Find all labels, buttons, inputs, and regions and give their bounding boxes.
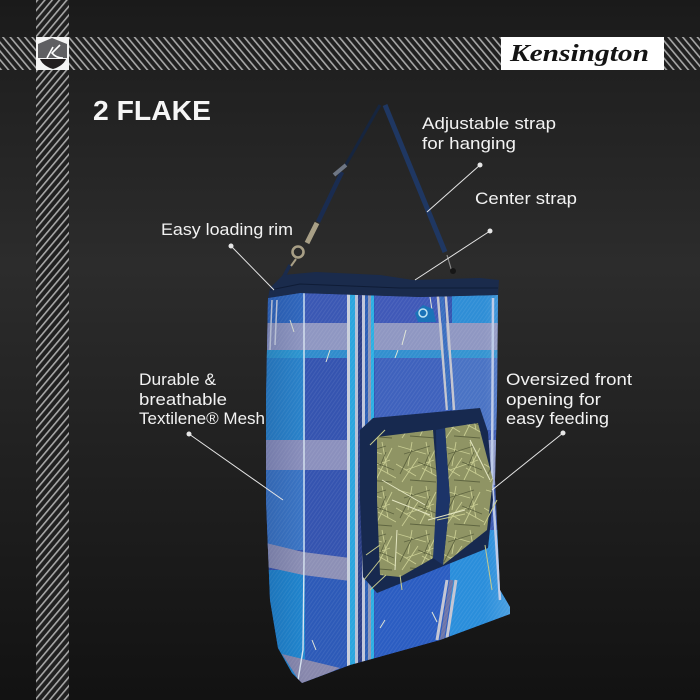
hay specks on fabric bbox=[290, 297, 437, 650]
icon: K shield logo bbox=[36, 37, 69, 70]
callout: front opening: opening for bbox=[506, 390, 601, 409]
callout: adjustable strap bbox=[422, 114, 556, 212]
callout: textilene mesh: breathable bbox=[139, 390, 227, 409]
callout: textilene mesh: Textilene® Mesh bbox=[139, 409, 265, 428]
callout: textilene mesh: Durable & bbox=[139, 370, 217, 389]
hanging strap bbox=[283, 105, 456, 278]
icon: metal snap clip bbox=[291, 223, 317, 266]
brand logo: Kensington bbox=[501, 37, 664, 70]
horizontal hatched band bbox=[0, 37, 700, 70]
hay left flake bbox=[377, 430, 437, 577]
center strap bbox=[433, 428, 450, 565]
bag logo patch bbox=[415, 305, 436, 322]
callout: front opening: Oversized front bbox=[506, 370, 632, 389]
front opening frame bbox=[360, 408, 493, 593]
callout: easy loading rim: Easy loading rim bbox=[161, 220, 293, 239]
callout: center strap bbox=[415, 189, 577, 280]
hay strands bbox=[364, 430, 497, 590]
callout: adjustable strap: for hanging bbox=[422, 134, 516, 153]
callout: front opening bbox=[492, 370, 632, 490]
bag fabric plaid bbox=[260, 285, 515, 690]
horizontal grey bands bbox=[260, 323, 500, 350]
vertical hatched band bbox=[36, 0, 69, 700]
brand logo: Kensington: Kensington bbox=[509, 41, 649, 67]
hay bag bbox=[260, 272, 515, 690]
vertical stripes bbox=[347, 285, 374, 685]
title: 2 FLAKE bbox=[93, 95, 211, 126]
seams bbox=[298, 290, 304, 680]
callout: center strap: Center strap bbox=[475, 189, 577, 208]
callout: textilene mesh bbox=[139, 370, 283, 500]
hay right flake bbox=[443, 423, 493, 565]
callout: front opening: easy feeding bbox=[506, 409, 609, 428]
callout: easy loading rim bbox=[161, 220, 293, 290]
loading rim bbox=[268, 272, 499, 298]
callout: adjustable strap: Adjustable strap bbox=[422, 114, 556, 133]
